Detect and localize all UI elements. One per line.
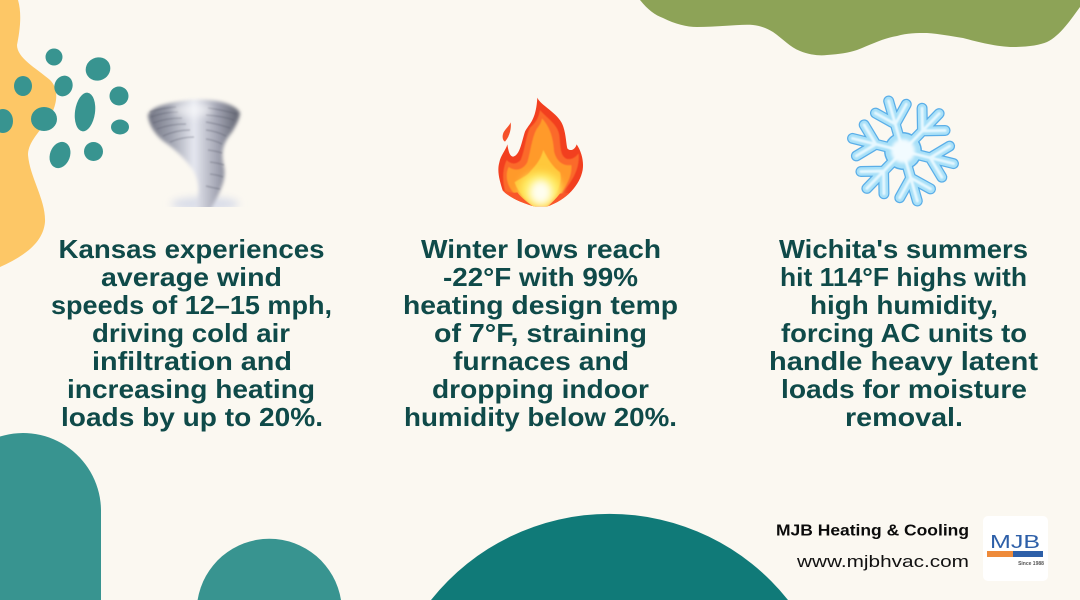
company name: MJB Heating & Cooling xyxy=(776,522,969,540)
logo: Since 1988 xyxy=(1018,561,1044,567)
text: winter column: Winter lows reach xyxy=(421,234,661,264)
text: wind column: loads by up to 20%. xyxy=(61,402,323,432)
teal dots cluster xyxy=(0,48,129,171)
text: wind column xyxy=(51,234,332,432)
yellow blob xyxy=(0,0,56,267)
top green blob xyxy=(640,0,1080,55)
text: summer column xyxy=(769,234,1038,432)
bottom middle teal arch xyxy=(198,539,341,600)
icon: tornado xyxy=(148,100,240,211)
logo: MJB xyxy=(990,532,1040,552)
text: winter column xyxy=(403,234,678,432)
bottom left teal arch xyxy=(0,433,101,600)
bottom centre dark teal arch xyxy=(431,514,788,600)
text: winter column: humidity below 20%. xyxy=(404,402,677,432)
text: summer column: Wichita's summers xyxy=(779,234,1028,264)
text: summer column: forcing AC units to xyxy=(781,318,1027,348)
text: winter column: furnaces and xyxy=(453,346,629,376)
text: wind column: speeds of 12–15 mph, xyxy=(51,290,332,320)
text: wind column: increasing heating xyxy=(67,374,315,404)
text: summer column: high humidity, xyxy=(810,290,998,320)
text: winter column: -22°F with 99% xyxy=(443,262,638,292)
text: summer column: hit 114°F highs with xyxy=(780,262,1027,292)
text: wind column: driving cold air xyxy=(92,318,290,348)
text: summer column: loads for moisture xyxy=(781,374,1027,404)
text: wind column: Kansas experiences xyxy=(58,234,324,264)
website: www.mjbhvac.com xyxy=(796,552,969,571)
text: summer column: removal. xyxy=(845,402,963,432)
text: summer column: handle heavy latent xyxy=(769,346,1038,376)
text: winter column: dropping indoor xyxy=(432,374,649,404)
icon: snowflake xyxy=(838,86,968,216)
text: winter column: heating design temp xyxy=(403,290,678,320)
text: wind column: average wind xyxy=(101,262,282,292)
text: winter column: of 7°F, straining xyxy=(434,318,647,348)
logo xyxy=(983,516,1048,581)
icon: flame xyxy=(498,98,583,209)
text: wind column: infiltration and xyxy=(92,346,292,376)
